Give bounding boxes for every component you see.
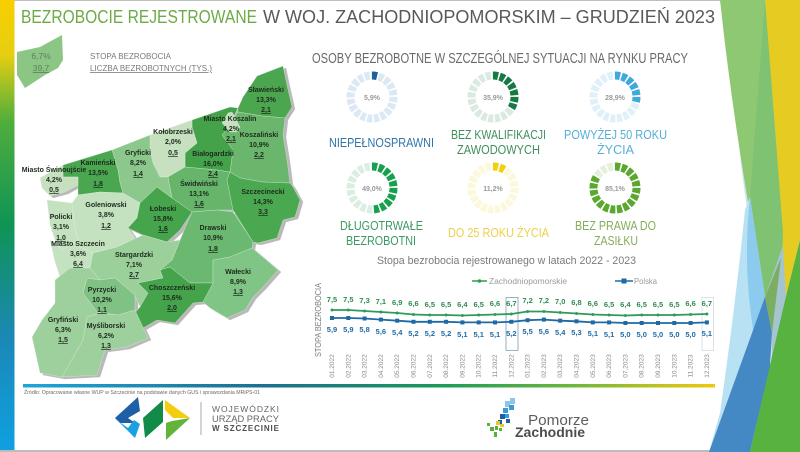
series: Zachodniopomorskie: 6,5 (636, 300, 647, 309)
mini map: województwo total: 6,7% (31, 51, 51, 61)
powiat labels: 16,0% (203, 161, 224, 168)
donut: powyżej 50 roku życia: POWYŻEJ 50 ROKU (564, 128, 667, 142)
series: Zachodniopomorskie: 7,1 (376, 297, 386, 306)
powiat labels: 10,2% (92, 297, 113, 304)
series: Zachodniopomorskie: 7,5 (343, 295, 354, 304)
donut: niepełnosprawni: 5,9% (364, 95, 381, 102)
series: Polska: 5,6 (539, 327, 549, 336)
series: Polska: 5,2 (441, 329, 451, 338)
powiat labels (22, 87, 285, 350)
powiat labels: 3,1% (53, 224, 70, 231)
donut: powyżej 50 roku życia (564, 76, 667, 157)
series: Zachodniopomorskie: 6,5 (604, 300, 614, 309)
powiat labels: 10,9% (249, 142, 270, 149)
powiat labels: 10,9% (203, 235, 224, 242)
donut: bez kwalifikacji: BEZ KWALIFIKACJI (451, 128, 546, 142)
powiat labels: 3,3 (258, 209, 268, 216)
donut: bez prawa do zasiłku: BEZ PRAWA DO (575, 219, 656, 233)
powiat labels: 2,4 (208, 171, 218, 178)
x axis dates: 03.2023 (557, 354, 564, 378)
powiat labels: 1,0 (56, 235, 66, 242)
powiat labels: 3,8% (98, 212, 115, 219)
map legend (90, 52, 212, 73)
powiat labels: Drawski (200, 225, 226, 232)
series: Zachodniopomorskie: 6,7 (506, 299, 517, 308)
series: Polska: 5,1 (702, 329, 712, 338)
x axis dates: 04.2022 (378, 354, 385, 378)
powiat labels: Białogardzki (192, 151, 234, 158)
powiat labels: 1,6 (194, 201, 204, 208)
series: Zachodniopomorskie: 7,2 (539, 296, 549, 305)
powiat labels: 1,3 (233, 289, 243, 296)
series: Polska: 5,1 (604, 330, 614, 339)
series: Zachodniopomorskie: 6,6 (588, 299, 598, 308)
powiat labels: 13,3% (256, 97, 277, 104)
x axis dates: 05.2022 (394, 354, 401, 378)
x axis dates: 05.2023 (590, 354, 597, 378)
x axis dates: 08.2023 (639, 354, 646, 378)
powiat labels: Miasto Szczecin (51, 241, 105, 248)
powiat labels: 1,6 (158, 226, 168, 233)
powiat labels: Myśliborski (87, 323, 125, 330)
powiat labels: 14,3% (253, 199, 274, 206)
series: Polska: 5,8 (359, 325, 370, 334)
powiat labels: Policki (50, 214, 72, 221)
series: Polska: 5,0 (653, 330, 663, 339)
powiat labels: Pyrzycki (88, 287, 116, 294)
series: Zachodniopomorskie: 7,3 (359, 296, 370, 305)
mini map: województwo total (17, 35, 63, 88)
series: Zachodniopomorskie (327, 295, 712, 317)
donut: do 25 roku życia: DO 25 ROKU ŻYCIA (448, 226, 550, 240)
donut: powyżej 50 roku życia: ŻYCIA (597, 143, 635, 157)
donut: bez kwalifikacji: ZAWODOWYCH (457, 143, 540, 157)
powiat labels: Łobeski (150, 206, 176, 213)
donut: powyżej 50 roku życia: 28,9% (605, 95, 626, 102)
x axis dates: 08.2022 (443, 354, 450, 378)
series: Polska: 5,9 (343, 325, 354, 334)
x axis dates: 11.2023 (688, 354, 695, 378)
donut: długotrwale bezrobotni: BEZROBOTNI (346, 234, 416, 248)
powiat labels: Gryfiński (48, 317, 78, 324)
powiat labels: 13,1% (189, 191, 210, 198)
donut: niepełnosprawni: NIEPEŁNOSPRAWNI (329, 136, 434, 150)
series: Zachodniopomorskie: 6,6 (408, 299, 419, 308)
series: Polska: 5,1 (457, 330, 468, 339)
donut: długotrwale bezrobotni (340, 166, 423, 248)
powiat labels: 0,5 (168, 150, 178, 157)
series: Zachodniopomorskie: 6,6 (490, 299, 500, 308)
powiat labels: 1,1 (97, 307, 107, 314)
line chart: stopa bezrobocia (313, 255, 714, 378)
x axis dates: 01.2022 (329, 354, 336, 378)
y axis label: STOPA BEZROBOCIA (313, 283, 323, 357)
series: Zachodniopomorskie: 6,5 (441, 300, 451, 309)
powiat labels: 1,8 (93, 181, 103, 188)
series: Zachodniopomorskie: 6,4 (620, 300, 631, 309)
x axis dates: 06.2023 (606, 354, 613, 378)
powiat labels: Goleniowski (85, 202, 127, 209)
x axis dates: 09.2022 (459, 354, 466, 378)
map legend: STOPA BEZROBOCIA (90, 52, 172, 61)
mini map: województwo total: 39,7 (33, 63, 50, 73)
source note: Źródło: Opracowanie własne WUP w Szczecinie na podstawie danych GUS i sprawozdania MRiPS-01 (24, 389, 260, 396)
map legend: LICZBA BEZROBOTNYCH (TYS.) (90, 64, 212, 73)
powiat labels: 4,2% (46, 177, 63, 184)
donut: niepełnosprawni (329, 76, 434, 150)
powiat labels: 8,2% (130, 160, 147, 167)
logo: Wojewódzki Urząd Pracy: W SZCZECINIE (212, 424, 280, 433)
powiat labels: Kołobrzeski (153, 129, 193, 136)
powiat labels: 15,8% (153, 216, 174, 223)
right decorative triangles (709, 0, 800, 452)
powiat labels: 1,8 (208, 246, 218, 253)
donut: bez prawa do zasiłku (575, 166, 656, 248)
series: Polska: 5,2 (506, 329, 517, 338)
x axis dates: 02.2022 (345, 354, 352, 378)
chart legend: Zachodniopomorskie (489, 277, 568, 286)
series: Polska: 5,0 (669, 330, 680, 339)
x axis dates: 09.2023 (655, 354, 662, 378)
series: Zachodniopomorskie: 7,5 (327, 295, 337, 304)
powiat labels: Miasto Świnoujście (22, 165, 86, 174)
series: Zachodniopomorskie: 6,5 (653, 300, 663, 309)
series: Zachodniopomorskie: 6,5 (669, 300, 680, 309)
chart title: Stopa bezrobocia rejestrowanego w latach 2022 - 2023 (377, 255, 636, 267)
donut: długotrwale bezrobotni: DŁUGOTRWAŁE (340, 219, 423, 233)
series: Polska: 5,0 (685, 330, 696, 339)
powiat labels: 1,2 (101, 223, 111, 230)
donut: długotrwale bezrobotni: 49,0% (362, 186, 383, 193)
x axis dates: 10.2022 (476, 354, 483, 378)
powiat labels: 0,5 (49, 187, 59, 194)
left gradient bar (0, 0, 14, 450)
series: Polska: 5,2 (408, 329, 419, 338)
series: Polska: 5,2 (425, 329, 435, 338)
logo: Pomorze Zachodnie: Zachodnie (515, 424, 585, 440)
powiat labels: Kamieński (80, 160, 116, 167)
title (21, 7, 715, 27)
series: Polska: 5,1 (588, 329, 598, 338)
highlight boxes (506, 298, 714, 350)
powiat labels: 2,1 (226, 136, 236, 143)
powiat labels: 6,3% (55, 327, 72, 334)
x axis dates: 01.2023 (525, 354, 532, 378)
chart legend: Polska (634, 277, 658, 286)
powiat labels: 2,2 (254, 152, 264, 159)
series: Zachodniopomorskie: 6,5 (425, 300, 435, 309)
powiat labels: 4,2% (223, 126, 240, 133)
powiat labels: 6,2% (98, 333, 115, 340)
series: Polska: 5,3 (571, 328, 582, 337)
donut: bez kwalifikacji: 35,9% (483, 95, 504, 102)
chart legend (472, 277, 658, 286)
series: Polska: 5,1 (473, 330, 484, 339)
powiat labels: 3,6% (70, 251, 87, 258)
series: Zachodniopomorskie: 6,7 (702, 299, 712, 308)
powiat labels: Świdwiński (180, 179, 218, 188)
section heading: OSOBY BEZROBOTNE W SZCZEGÓLNEJ SYTUACJI NA RYNKU PRACY (312, 50, 688, 67)
series: Polska: 5,0 (636, 330, 647, 339)
series: Polska: 5,0 (620, 330, 631, 339)
powiat labels: 7,1% (126, 262, 143, 269)
series: Zachodniopomorskie: 6,9 (392, 298, 402, 307)
series: Zachodniopomorskie: 6,6 (685, 299, 696, 308)
powiat labels: Stargardzki (115, 252, 153, 259)
powiat labels: Gryficki (125, 150, 151, 157)
series: Polska: 5,9 (327, 325, 337, 334)
powiat labels: 1,3 (101, 343, 111, 350)
donut: bez prawa do zasiłku: ZASIŁKU (594, 234, 638, 248)
powiat labels: 2,0 (167, 305, 177, 312)
powiat labels: 2,7 (129, 272, 139, 279)
series: Zachodniopomorskie: 7,2 (522, 296, 533, 305)
x axis dates: 02.2023 (541, 354, 548, 378)
powiat labels: Koszaliński (240, 132, 278, 139)
series: Zachodniopomorskie: 6,4 (457, 300, 468, 309)
powiat labels: 15,6% (162, 295, 183, 302)
series: Polska: 5,6 (376, 327, 386, 336)
powiat labels: Szczecinecki (241, 189, 285, 196)
x axis dates (329, 354, 711, 378)
powiat labels: Wałecki (225, 269, 251, 276)
powiat labels: 1,4 (133, 171, 143, 178)
powiat labels: 6,4 (73, 261, 83, 268)
series: Polska: 5,5 (522, 327, 533, 336)
series: Zachodniopomorskie: 6,8 (571, 298, 582, 307)
x axis dates: 06.2022 (410, 354, 418, 378)
map of powiats (22, 66, 300, 377)
logo: Pomorze Zachodnie: Pomorze (528, 412, 589, 429)
series: Polska: 5,4 (555, 328, 566, 337)
series: Zachodniopomorskie: 7,0 (555, 297, 565, 306)
donut: do 25 roku życia (448, 166, 550, 240)
x axis dates: 07.2022 (427, 354, 434, 378)
x axis dates: 11.2022 (492, 354, 499, 378)
powiat labels: 8,9% (230, 279, 247, 286)
series: Polska (327, 316, 712, 339)
powiat labels: Sławieński (248, 87, 284, 94)
powiat labels: Choszczeński (149, 285, 195, 292)
powiat labels: 2,1 (261, 107, 271, 114)
series: Zachodniopomorskie: 6,5 (473, 300, 484, 309)
x axis dates: 07.2023 (622, 354, 629, 378)
title: BEZROBOCIE REJESTROWANE (21, 7, 257, 27)
series: Polska: 5,4 (392, 328, 403, 337)
powiat labels: Miasto Koszalin (204, 116, 256, 123)
x axis dates: 10.2023 (671, 354, 678, 378)
logo: Wojewódzki Urząd Pracy: WOJEWÓDZKI (212, 404, 279, 414)
donut: do 25 roku życia: 11,2% (483, 186, 504, 193)
series: Polska: 5,1 (490, 330, 500, 339)
donut: bez prawa do zasiłku: 85,1% (605, 186, 626, 193)
logo: Wojewódzki Urząd Pracy (115, 397, 280, 440)
x axis dates: 12.2022 (508, 354, 515, 378)
donut: bez kwalifikacji (451, 76, 546, 157)
x axis dates: 04.2023 (574, 354, 580, 378)
x axis dates: 12.2023 (704, 354, 711, 378)
powiat labels: 2,0% (165, 139, 182, 146)
powiat labels: 13,5% (88, 170, 109, 177)
x axis dates: 03.2022 (362, 354, 369, 378)
title: W WOJ. ZACHODNIOPOMORSKIM – GRUDZIEŃ 2023 (263, 7, 715, 27)
logo: Wojewódzki Urząd Pracy: URZĄD PRACY (212, 414, 280, 425)
powiat labels: 1,5 (58, 337, 68, 344)
logo: Pomorze Zachodnie (487, 398, 589, 440)
